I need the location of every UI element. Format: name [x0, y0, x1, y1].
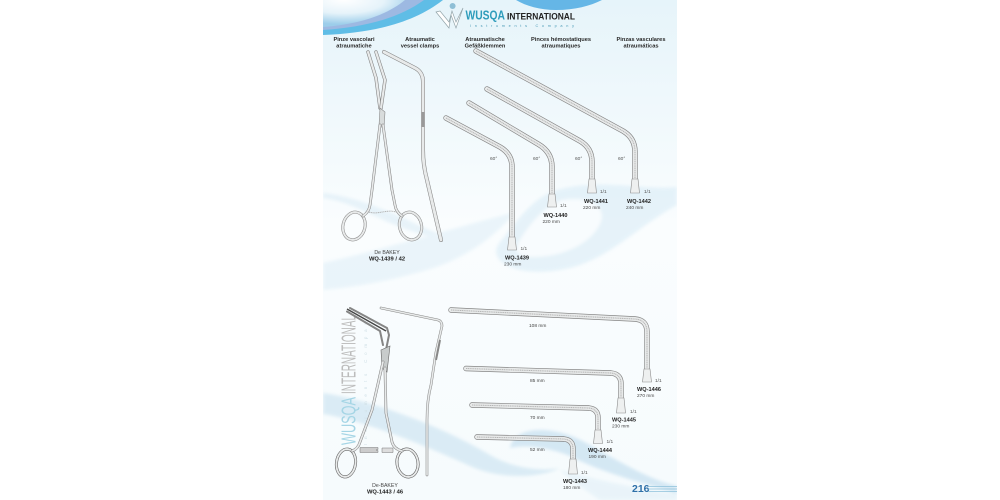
watermark	[338, 314, 368, 445]
clamp WQ-1445: 230 mm	[612, 424, 629, 430]
headings: atraumatiques	[542, 43, 580, 49]
page number: 216	[632, 483, 650, 495]
clamp WQ-1443: 180 mm	[563, 485, 580, 491]
clamp WQ-1440: 1/1	[560, 203, 567, 209]
clamp WQ-1446: 1/1	[655, 378, 662, 384]
clamp WQ-1445	[466, 368, 637, 430]
forceps top side view	[384, 52, 441, 240]
clamp WQ-1446: 108 mm	[529, 323, 546, 329]
watermark: WUSQA	[338, 397, 360, 445]
clamp WQ-1440: 220 mm	[542, 219, 560, 225]
headings: vessel clamps	[401, 43, 439, 49]
clamp WQ-1440: WQ-1440	[544, 213, 567, 219]
clamp WQ-1445: WQ-1445	[612, 418, 636, 424]
headings: Pinzas vasculares	[616, 37, 666, 43]
label: De Bakey bottom: De-BAKEY	[372, 483, 398, 489]
clamp WQ-1442: WQ-1442	[627, 199, 651, 205]
clamp WQ-1439: 60°	[490, 156, 497, 162]
clamp WQ-1444: 1/1	[606, 439, 614, 445]
clamp WQ-1446: WQ-1446	[637, 387, 661, 393]
headings: Pinze vascolari	[333, 37, 375, 43]
top right swoosh	[516, 0, 602, 10]
clamp WQ-1442: 60°	[618, 156, 625, 162]
clamp WQ-1443	[477, 437, 588, 491]
clamp WQ-1446: 270 mm	[637, 393, 654, 399]
tagline: Instruments Company	[470, 24, 574, 28]
clamp WQ-1444	[472, 405, 614, 460]
forceps top	[340, 52, 441, 242]
clamp WQ-1445: 1/1	[630, 409, 637, 415]
clamp WQ-1441: 220 mm	[583, 205, 600, 211]
forceps bottom	[335, 308, 442, 478]
clamp WQ-1442: 240 mm	[626, 205, 643, 211]
clamp WQ-1440	[469, 103, 567, 225]
headings: atraumáticas	[623, 43, 659, 49]
headings: Gefäßklemmen	[465, 43, 506, 49]
clamp WQ-1442: 1/1	[644, 189, 651, 195]
clamp WQ-1441: 60°	[575, 156, 582, 162]
clamp WQ-1439	[446, 118, 529, 268]
headings	[333, 37, 666, 49]
clamp WQ-1444: WQ-1444	[588, 448, 613, 454]
top left swoosh	[323, 0, 443, 35]
watermark: INTERNATIONAL	[338, 315, 360, 394]
clamp WQ-1443: WQ-1443	[563, 479, 587, 485]
clamp WQ-1441: 1/1	[600, 189, 607, 195]
logo: INTERNATIONAL	[507, 12, 576, 22]
clamp WQ-1439: 1/1	[520, 246, 528, 252]
label: De Bakey bottom	[367, 483, 404, 496]
label: De Bakey top: WQ-1439 / 42	[369, 256, 405, 262]
watermark: Instruments Company	[363, 314, 368, 445]
headings: Atraumatische	[465, 37, 505, 43]
clamp WQ-1439: 230 mm	[504, 262, 521, 268]
clamp WQ-1445: 85 mm	[530, 378, 545, 384]
clamp WQ-1439: WQ-1439	[505, 256, 529, 262]
headings: Pinces hémostatiques	[531, 37, 591, 43]
icon: W globe mark	[436, 3, 463, 28]
page background	[323, 0, 677, 500]
clamp WQ-1444: 70 mm	[530, 415, 545, 421]
clamp WQ-1443: 1/1	[581, 470, 588, 476]
clamp WQ-1441	[487, 89, 608, 211]
logo	[436, 3, 576, 28]
mid swoosh	[323, 185, 677, 290]
clamp WQ-1440: 60°	[533, 156, 540, 162]
label: De Bakey bottom: WQ-1443 / 46	[367, 490, 404, 496]
clamp WQ-1446	[451, 310, 662, 399]
company name: WUSQA	[466, 8, 505, 22]
clamp WQ-1442	[476, 51, 651, 211]
clamp WQ-1441: WQ-1441	[584, 199, 608, 205]
headings: Atraumatic	[405, 37, 435, 43]
label: De Bakey top	[369, 250, 405, 262]
clamp WQ-1443: 52 mm	[530, 447, 545, 453]
clamp WQ-1444: 190 mm	[588, 454, 606, 460]
headings: atraumatiche	[336, 43, 372, 49]
lower swoosh	[323, 393, 677, 500]
forceps bottom side view	[381, 308, 442, 475]
label: De Bakey top: De BAKEY	[374, 250, 400, 256]
page number	[632, 483, 677, 495]
